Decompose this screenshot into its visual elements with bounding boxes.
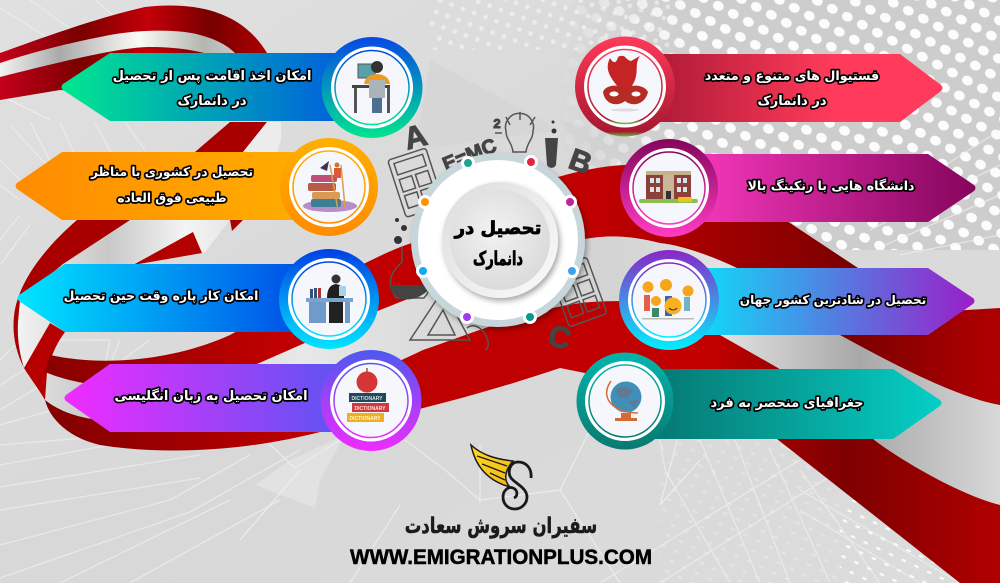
label: امکان اخذ اقامت پس از تحصیل — [113, 69, 311, 84]
panel: unique geography — [576, 352, 942, 450]
icon: university building — [639, 171, 698, 203]
panel: study in English — [64, 350, 422, 451]
label: فستیوال های متنوع و متعدد — [705, 68, 879, 83]
education doodles around the central badge: C — [545, 319, 574, 357]
education doodles around the central badge: 2 — [493, 116, 501, 131]
label — [113, 69, 311, 109]
label — [90, 165, 253, 205]
panel: residence after study — [62, 37, 422, 138]
icon: apple on dictionaries: DICTIONARY — [352, 396, 383, 402]
panel: happiest country — [619, 250, 974, 350]
label: طبیعی فوق العاده — [117, 191, 227, 205]
badge title: تحصیل در — [454, 218, 541, 239]
label: تحصیل در شادترین کشور جهان — [740, 293, 926, 308]
ribbon: main wave upper red stripe — [45, 165, 1000, 405]
brand logo — [350, 445, 652, 569]
icon: office desk — [306, 274, 353, 323]
icon: apple on dictionaries — [347, 368, 389, 422]
label: تحصیل در کشوری با مناظر — [90, 165, 253, 179]
central badge: Studying in Denmark — [411, 153, 585, 327]
panel: nature — [16, 138, 378, 236]
label — [705, 68, 879, 109]
label: امکان کار پاره وقت حین تحصیل — [64, 288, 258, 303]
icon: apple on dictionaries: DICTIONARY — [355, 406, 386, 412]
icon: stack of books with ladder — [303, 161, 357, 212]
badge title — [454, 218, 541, 270]
panel: high ranking universities — [620, 139, 976, 237]
panel: part-time work — [18, 249, 379, 349]
ribbon: main wave silver — [30, 200, 1000, 520]
logo wordmark: سفیران سروش سعادت — [405, 513, 597, 539]
icon: happy emoji people — [642, 279, 694, 320]
education doodles around the central badge — [388, 112, 607, 357]
icon: carnival mask — [603, 56, 648, 112]
badge colored connector dots — [418, 156, 578, 322]
ribbon: left loop — [13, 220, 243, 400]
education doodles around the central badge: E=MC — [440, 135, 500, 176]
badge title: دانمارک — [473, 247, 523, 270]
label: امکان تحصیل به زبان انگلیسی — [114, 388, 308, 404]
icon: globe — [607, 381, 642, 421]
label: در دانمارک — [177, 94, 247, 109]
panel: festivals — [575, 36, 942, 136]
logo icon: winged bird — [471, 445, 531, 509]
label: دانشگاه هایی با رنکینگ بالا — [747, 178, 915, 193]
education doodles around the central badge: A — [400, 117, 431, 157]
ribbon: upper left curl — [0, 6, 290, 152]
icon: apple on dictionaries: DICTIONARY — [350, 416, 381, 422]
website URL: WWW.EMIGRATIONPLUS.COM — [350, 546, 652, 569]
education doodles around the central badge: B — [564, 143, 596, 181]
label: جغرافیای منحصر به فرد — [710, 396, 864, 411]
label: در دانمارک — [757, 94, 827, 109]
icon: person at computer — [352, 61, 390, 113]
ribbon: main wave lower red stripe — [45, 301, 1000, 583]
